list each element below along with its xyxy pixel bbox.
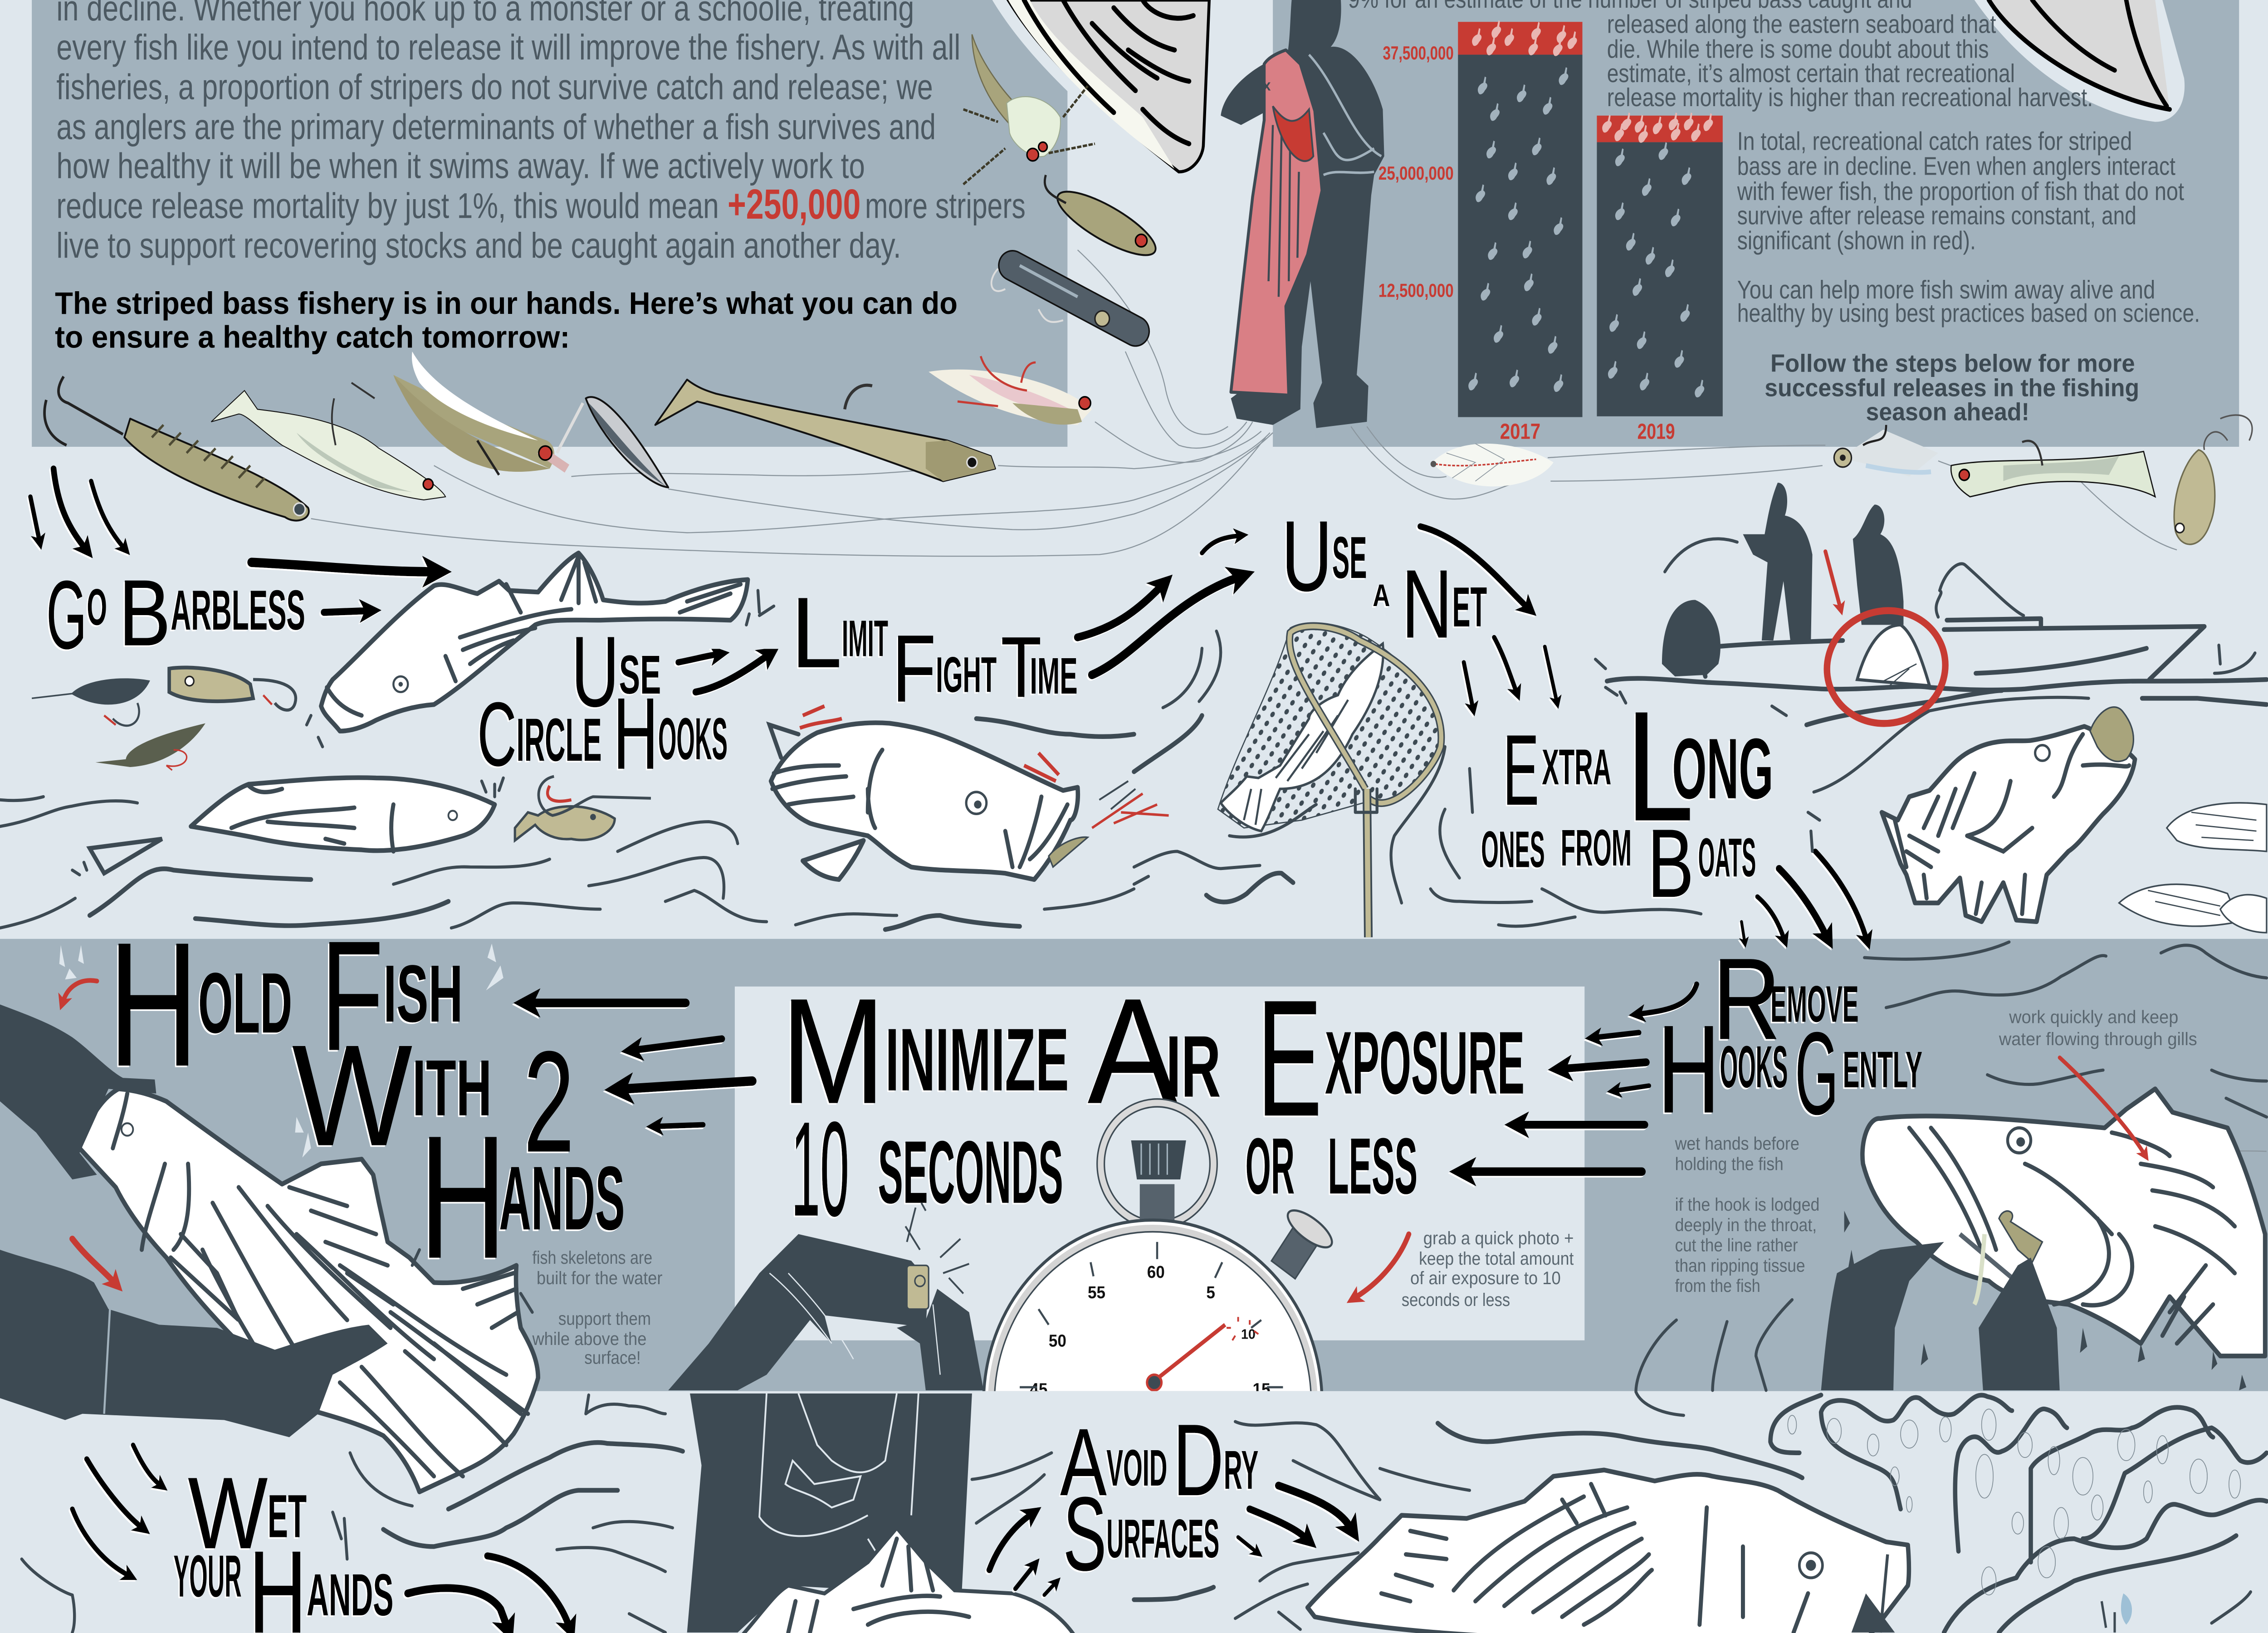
water drops: around hold fish bbox=[59, 944, 503, 1158]
heading: extra long ones from boats: B bbox=[1647, 809, 1694, 917]
text: hook removal notes: than ripping tissue bbox=[1675, 1256, 1805, 1276]
text: best practices: healthy by using best practices based on science. bbox=[1737, 298, 2200, 328]
heading: extra long ones from boats: ONES bbox=[1481, 821, 1545, 878]
illustration: wading angler legs bbox=[687, 1393, 972, 1633]
x axis labels: 2019 bbox=[1637, 419, 1675, 444]
big fin top right bbox=[1975, 0, 2185, 122]
heading: limit fight time: IGHT bbox=[936, 647, 997, 703]
heading: use circle hooks: C bbox=[477, 684, 516, 785]
panel: minimize air exposure box bbox=[735, 987, 1584, 1340]
heading: wet your hands bbox=[174, 1457, 393, 1633]
heading: 10 seconds or less: OR bbox=[1246, 1121, 1295, 1210]
text: best practices bbox=[1737, 275, 2200, 328]
heading: 10 seconds or less: SECONDS bbox=[878, 1123, 1063, 1222]
heading: limit fight time: F bbox=[892, 615, 936, 722]
arrows: out of wet hands bbox=[408, 1556, 568, 1625]
heading: go barbless: O bbox=[87, 579, 107, 636]
heading: go barbless: ARBLESS bbox=[171, 579, 305, 642]
intro paragraph: as anglers are the primary determinants of whether a fish survives and bbox=[56, 107, 936, 147]
heading: wet your hands: YOUR bbox=[174, 1543, 242, 1609]
heading: extra long ones from boats: L bbox=[1626, 680, 1694, 854]
heading: hold fish with 2 hands: F bbox=[321, 909, 383, 1083]
text: release mortality estimate: estimate, it’s almost certain that recreational bbox=[1607, 59, 2015, 88]
heading: wet your hands: ET bbox=[268, 1482, 307, 1550]
red hand bbox=[1154, 1325, 1225, 1381]
arrows: into wet hands bbox=[72, 1445, 159, 1574]
illustration: stopwatch bbox=[983, 1103, 1337, 1586]
text: fish skeletons note: support them bbox=[558, 1309, 651, 1329]
heading: avoid dry surfaces: VOID bbox=[1106, 1439, 1167, 1497]
heading: minimize air exposure: INIMIZE bbox=[885, 1010, 1069, 1110]
text: catch rates in decline: survive after release remains constant, and bbox=[1737, 201, 2136, 230]
text: hook removal notes: if the hook is lodged bbox=[1675, 1195, 1819, 1215]
lure: feathered fly bbox=[963, 34, 1095, 184]
heading: hold fish with 2 hands: ITH bbox=[412, 1043, 492, 1132]
fishing lines from lures to angler bbox=[311, 250, 2267, 1212]
water lines: around bottom fish bbox=[1134, 1422, 1802, 1629]
net mesh bbox=[1218, 623, 1441, 828]
heading: minimize air exposure: A bbox=[1088, 968, 1178, 1135]
heading: hold fish with 2 hands: W bbox=[292, 1015, 413, 1176]
red arrow: to stopwatch bbox=[1357, 1234, 1409, 1296]
intro paragraph bbox=[56, 0, 1026, 266]
lures: popper and flies bbox=[32, 668, 296, 770]
heading: 10 seconds or less bbox=[791, 1095, 1418, 1244]
arrows: toward hold fish bbox=[532, 1003, 752, 1126]
heading: limit fight time: L bbox=[791, 577, 842, 689]
illustration: anglers on boat bbox=[1595, 483, 2267, 732]
water lines: section one bbox=[0, 631, 1701, 929]
fishing rod bbox=[1665, 539, 1737, 572]
lure: pink fly bbox=[929, 356, 1092, 425]
illustration: upper hand holding fish jaw bbox=[0, 1004, 156, 1179]
illustration: thrashing striped bass bbox=[769, 706, 1169, 880]
text: work quickly note bbox=[1999, 1007, 2197, 1049]
text: catch rates in decline: bass are in decline. Even when anglers interact bbox=[1737, 152, 2175, 181]
angler silhouette holding fish bbox=[1221, 0, 1384, 428]
big tail fin top centre bbox=[992, 0, 1218, 178]
dial numbers: 5 bbox=[1206, 1283, 1215, 1302]
net hoop bbox=[1290, 626, 1441, 803]
intro paragraph: every fish like you intend to release it will improve the fishery. As with all bbox=[56, 27, 960, 68]
lure: pale swim shad right bbox=[1951, 441, 2155, 497]
heading: remove hooks gently: G bbox=[1795, 1008, 1838, 1139]
heading: limit fight time bbox=[791, 577, 1078, 722]
illustration: fish in front of legs bbox=[738, 1528, 1078, 1633]
text: OOKS bbox=[658, 705, 728, 772]
intro paragraph: more stripers bbox=[865, 186, 1026, 226]
text: grab a quick photo: seconds or less bbox=[1402, 1290, 1510, 1310]
intro paragraph: fisheries, a proportion of stripers do not survive catch and release; we bbox=[56, 67, 933, 107]
heading: hold fish with 2 hands: H bbox=[420, 1100, 506, 1295]
text: hook removal notes: holding the fish bbox=[1675, 1154, 1784, 1174]
caught fish held by angler bbox=[1231, 50, 1322, 395]
text: work quickly note: work quickly and keep bbox=[2009, 1007, 2178, 1027]
dial numbers: 60 bbox=[1147, 1262, 1165, 1281]
heading: use circle hooks: IRCLE bbox=[516, 706, 602, 774]
text: catch rates in decline: In total, recreational catch rates for striped bbox=[1737, 127, 2132, 156]
heading: extra long ones from boats: OATS bbox=[1698, 827, 1756, 888]
text: grab a quick photo: keep the total amount bbox=[1419, 1249, 1574, 1269]
arrows: to bottom fish bbox=[1238, 1486, 1349, 1551]
arrows: to avoid dry surfaces bbox=[989, 1516, 1055, 1595]
water lines: band right bbox=[1636, 942, 2267, 1415]
lure: white fly right bbox=[1431, 444, 1554, 486]
illustration: hands holding phone bbox=[668, 1203, 983, 1390]
y axis labels: 37,500,000 bbox=[1383, 43, 1454, 64]
arrows: to remove hooks bbox=[1741, 851, 1866, 940]
text: hook removal notes: wet hands before bbox=[1675, 1134, 1799, 1154]
heading: go barbless: G bbox=[46, 561, 87, 669]
call to action text: to ensure a healthy catch tomorrow: bbox=[55, 320, 570, 355]
heading: wet your hands: ANDS bbox=[307, 1562, 393, 1628]
text: grab a quick photo bbox=[1402, 1228, 1574, 1310]
heading: use a net: A bbox=[1373, 578, 1390, 613]
illustration: bottom striped bass bbox=[1308, 1470, 1909, 1633]
illustration: small stripers bbox=[2119, 803, 2267, 933]
text: hook removal notes: cut the line rather bbox=[1675, 1235, 1798, 1256]
text: release mortality estimate bbox=[1348, 0, 2093, 112]
panel: catch data background bbox=[1273, 0, 2239, 447]
illustration: gloved hands with pliers bbox=[1821, 1242, 2060, 1390]
intro paragraph: +250,000 bbox=[728, 181, 860, 228]
heading: extra long ones from boats: E bbox=[1503, 714, 1539, 826]
illustration: leaping striped bass bbox=[307, 553, 774, 747]
heading: hold fish with 2 hands: ISH bbox=[383, 948, 463, 1039]
net highlight bbox=[1857, 625, 1930, 686]
heading: limit fight time: T bbox=[1001, 619, 1041, 715]
lure: silver spoon bbox=[557, 397, 668, 487]
text: follow the steps: Follow the steps below for more bbox=[1770, 350, 2135, 377]
arrows: to limit fight time bbox=[679, 655, 767, 692]
text: fish skeletons note: while above the bbox=[532, 1329, 646, 1349]
lure: small bucktail right bbox=[1834, 425, 1938, 476]
heading: remove hooks gently bbox=[1657, 935, 1922, 1139]
lure: olive treble plug bbox=[44, 376, 309, 521]
dial numbers bbox=[1030, 1262, 1270, 1399]
heading: use circle hooks: U bbox=[572, 616, 619, 728]
heading: use a net: N bbox=[1402, 550, 1452, 658]
anglers silhouettes bbox=[1743, 483, 1813, 644]
water line bbox=[1607, 679, 2267, 690]
heading: minimize air exposure: E bbox=[1257, 966, 1322, 1151]
heading: 10 seconds or less: 10 bbox=[791, 1095, 849, 1244]
lure: grey popper bbox=[992, 265, 1135, 331]
outboard motor bbox=[1662, 600, 1721, 676]
text: work quickly note: water flowing through gills bbox=[1999, 1029, 2197, 1049]
y axis labels: 25,000,000 bbox=[1378, 163, 1454, 184]
text: grab a quick photo: of air exposure to 10 bbox=[1410, 1268, 1561, 1288]
net handle bbox=[1367, 789, 1369, 937]
x axis labels bbox=[1500, 419, 1675, 444]
heading: extra long ones from boats: FROM bbox=[1561, 819, 1632, 877]
red arrows: hand position bbox=[64, 980, 113, 1281]
bar: 2017 bbox=[1458, 22, 1583, 417]
heading: avoid dry surfaces bbox=[1060, 1403, 1258, 1593]
illustration: large fish held with two hands bbox=[79, 1089, 538, 1492]
heading: hold fish with 2 hands: 2 bbox=[523, 1022, 574, 1182]
heading: use a net: SE bbox=[1332, 524, 1367, 591]
y axis labels bbox=[1378, 43, 1454, 301]
heading: use a net: U bbox=[1281, 501, 1332, 612]
lure: khaki spoon right bbox=[2174, 415, 2252, 544]
heading: remove hooks gently: R bbox=[1713, 935, 1780, 1064]
heading: minimize air exposure: M bbox=[781, 968, 885, 1135]
heading: extra long ones from boats: XTRA bbox=[1542, 739, 1611, 795]
text: follow the steps: successful releases in the fishing bbox=[1765, 374, 2139, 402]
fish icons dead after release bbox=[1472, 20, 1713, 143]
panel: intro text background bbox=[32, 0, 1067, 447]
dial numbers: 10 bbox=[1241, 1326, 1256, 1342]
heading: hold fish with 2 hands: ANDS bbox=[499, 1148, 625, 1249]
heading: avoid dry surfaces: A bbox=[1060, 1409, 1106, 1515]
fish icons released alive bbox=[1468, 67, 1704, 397]
intro paragraph: live to support recovering stocks and be caught again another day. bbox=[56, 226, 901, 266]
text: LESS bbox=[1328, 1121, 1418, 1210]
heading: use circle hooks: H bbox=[613, 677, 658, 790]
chart: recreational catch by year bbox=[1378, 20, 1723, 444]
heading: avoid dry surfaces: URFACES bbox=[1106, 1508, 1219, 1569]
text: catch rates in decline: with fewer fish, the proportion of fish that do not bbox=[1737, 176, 2184, 205]
intro paragraph: how healthy it will be when it swims away. If we actively work to bbox=[56, 146, 865, 186]
dial numbers: 55 bbox=[1088, 1283, 1105, 1302]
lure: paddle tail soft bait bbox=[655, 380, 995, 481]
text: hook removal notes: from the fish bbox=[1675, 1276, 1760, 1296]
lure: white swim shad bbox=[211, 383, 445, 500]
text: catch rates in decline bbox=[1737, 127, 2184, 255]
text: hook removal notes bbox=[1675, 1134, 1819, 1296]
x axis labels: 2017 bbox=[1500, 419, 1540, 444]
stopwatch ring bbox=[1101, 1103, 1213, 1225]
heading: hold fish with 2 hands: OLD bbox=[198, 955, 292, 1051]
heading: wet your hands: W bbox=[188, 1457, 268, 1570]
side button bbox=[1262, 1204, 1337, 1286]
illustration: wet surface water edges with bubbles bbox=[1770, 1395, 2267, 1633]
caught fish held by angler: x bbox=[1263, 77, 1271, 94]
lure: bucktail bbox=[393, 352, 567, 475]
heading: remove hooks gently: H bbox=[1657, 1000, 1720, 1139]
dial ticks bbox=[1020, 1242, 1283, 1387]
text: release mortality estimate: released along the eastern seaboard that bbox=[1607, 9, 1996, 39]
text: release mortality estimate: die. While there is some doubt about this bbox=[1607, 34, 1989, 64]
arrows: into go barbless bbox=[30, 469, 431, 612]
dial numbers: 15 bbox=[1252, 1379, 1270, 1399]
text: XPOSURE bbox=[1325, 1013, 1525, 1113]
text: best practices: You can help more fish swim away alive and bbox=[1737, 275, 2155, 304]
crown bbox=[1131, 1140, 1186, 1179]
text: grab a quick photo: grab a quick photo + bbox=[1423, 1228, 1574, 1248]
heading: minimize air exposure bbox=[781, 966, 1525, 1151]
heading: use a net bbox=[1281, 501, 1487, 658]
intro paragraph: reduce release mortality by just 1%, this would mean bbox=[56, 186, 719, 226]
dial numbers: 50 bbox=[1049, 1331, 1066, 1350]
heading: use circle hooks bbox=[477, 616, 728, 790]
text: follow the steps: season ahead! bbox=[1866, 398, 2029, 426]
illustration: landing net with fish bbox=[1218, 623, 1441, 937]
arrows: toward minimize bbox=[1468, 984, 1696, 1172]
heading: extra long ones from boats: ONG bbox=[1672, 721, 1773, 816]
text: fish skeletons note: built for the water bbox=[537, 1268, 663, 1288]
heading: remove hooks gently: OOKS bbox=[1720, 1034, 1788, 1100]
arm highlight bbox=[104, 1309, 110, 1414]
arrows: to use a net bbox=[1078, 527, 1556, 706]
water drops: around unhooking bbox=[1844, 1211, 2246, 1390]
heading: use a net: ET bbox=[1452, 576, 1487, 639]
heading: extra long ones from boats bbox=[1481, 680, 1773, 917]
illustration: fish being unhooked bbox=[1862, 1058, 2265, 1356]
illustration: bass striking a fly bbox=[1808, 697, 2135, 922]
heading: use circle hooks: SE bbox=[619, 644, 661, 705]
heading: remove hooks gently: EMOVE bbox=[1770, 976, 1859, 1033]
text: fish skeletons note: fish skeletons are bbox=[532, 1248, 652, 1268]
heading: go barbless bbox=[46, 561, 305, 669]
heading: remove hooks gently: ENTLY bbox=[1843, 1041, 1922, 1099]
heading: go barbless: B bbox=[118, 561, 171, 665]
lure: olive plug bbox=[1045, 175, 1163, 266]
dial numbers: 45 bbox=[1030, 1379, 1047, 1399]
heading: avoid dry surfaces: RY bbox=[1224, 1439, 1258, 1501]
text: follow the steps bbox=[1765, 350, 2139, 426]
call to action text: The striped bass fishery is in our hands. Here’s what you can do bbox=[55, 286, 958, 321]
heading: limit fight time: IMIT bbox=[842, 610, 888, 667]
water lines: bottom left bbox=[22, 1395, 1051, 1633]
text: release mortality estimate: release mortality is higher than recreational harvest. bbox=[1607, 83, 2093, 112]
call to action text bbox=[55, 286, 958, 355]
illustration: fish lying in water bbox=[72, 777, 503, 875]
heading: hold fish with 2 hands: H bbox=[108, 906, 198, 1103]
illustration: bait fish on hook bbox=[515, 777, 651, 841]
text: catch rates in decline: significant (shown in red). bbox=[1737, 225, 1976, 255]
watch face bbox=[983, 1220, 1322, 1586]
heading: avoid dry surfaces: D bbox=[1173, 1403, 1224, 1517]
heading: avoid dry surfaces: S bbox=[1063, 1476, 1106, 1593]
illustration: lower hand and arm supporting fish bbox=[0, 1250, 388, 1437]
heading: hold fish with 2 hands bbox=[108, 906, 625, 1295]
text: hook removal notes: deeply in the throat, bbox=[1675, 1215, 1817, 1235]
text: fish skeletons note: surface! bbox=[584, 1348, 641, 1368]
text: fish skeletons note bbox=[532, 1248, 663, 1368]
heading: minimize air exposure: IR bbox=[1166, 1018, 1221, 1115]
heading: limit fight time: IME bbox=[1030, 647, 1078, 705]
fish in net bbox=[1221, 644, 1383, 831]
hull and console bbox=[1698, 640, 1843, 676]
band: minimize air exposure background bbox=[0, 939, 2268, 1391]
y axis labels: 12,500,000 bbox=[1378, 280, 1454, 301]
bar: 2019 bbox=[1597, 116, 1723, 416]
